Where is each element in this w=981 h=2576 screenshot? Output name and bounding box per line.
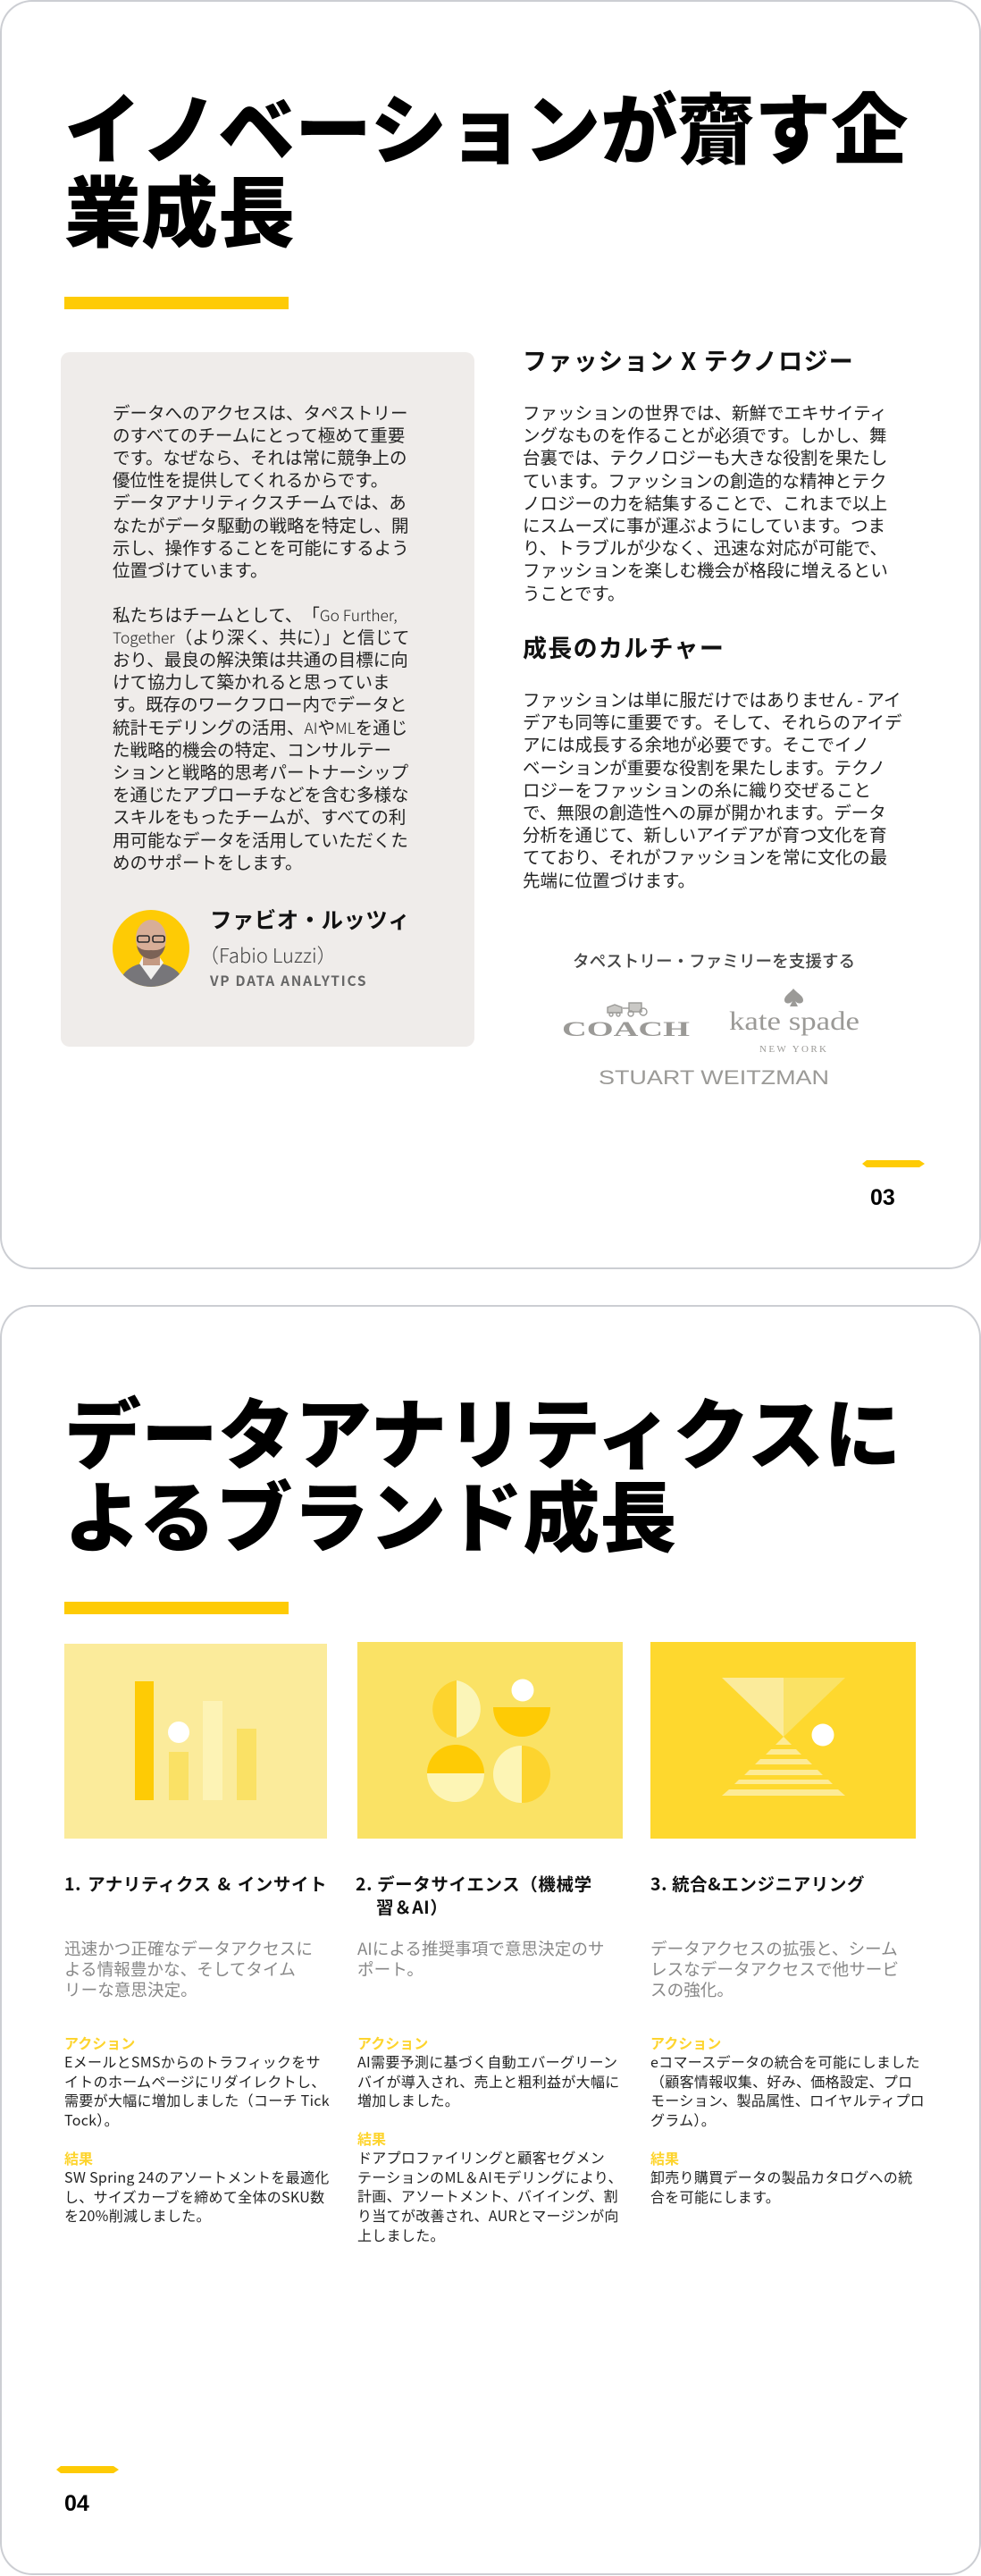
- column 3: [650, 1870, 925, 2207]
- logo: coach: [562, 1002, 690, 1040]
- action text: 需要が大幅に増加しました（コーチ Tick: [64, 2089, 330, 2110]
- column 1: [64, 1870, 330, 2226]
- description: 迅速かつ正確なデータアクセスに: [64, 1936, 313, 1959]
- heading: 3. 統合&エンジニアリング: [650, 1870, 865, 1896]
- text block: culture of growth: アには成長する余地が必要です。そこでイノ: [523, 730, 869, 756]
- description: レスなデータアクセスで他サービ: [650, 1956, 899, 1981]
- description: [357, 1936, 605, 1981]
- text block: quote paragraph 2: [113, 601, 410, 874]
- text block: quote paragraph 1: のすべてのチームにとって極めて重要: [113, 421, 405, 447]
- accent: page marker: [862, 1160, 925, 1167]
- text block: quote paragraph 1: 優位性を提供してくれるからです。: [113, 466, 388, 492]
- description: リーな意思決定。: [64, 1977, 197, 2000]
- action text: イトのホームページにリダイレクトし、: [64, 2070, 326, 2092]
- action text: （顧客情報収集、好み、価格設定、プロ: [650, 2070, 912, 2092]
- heading: 2. データサイエンス（機械学: [356, 1870, 592, 1896]
- logo: stuart weitzman: STUART WEITZMAN: [599, 1066, 829, 1089]
- text block: quote paragraph 2: た戦略的機会の特定、コンサルテー: [113, 736, 391, 762]
- result text: [650, 2166, 912, 2207]
- text block: fashion x technology: ファッションを楽しむ機会が格段に増えるとい: [523, 556, 888, 582]
- heading: [356, 1870, 592, 1919]
- result text: 合を可能にします。: [650, 2185, 780, 2207]
- title: innovation: [64, 68, 908, 263]
- action text: eコマースデータの統合を可能にしました: [650, 2050, 920, 2072]
- text block: fashion x technology: ングなものを作ることが必須です。しかし、舞: [523, 421, 887, 447]
- result text: ドアプロファイリングと顧客セグメン: [357, 2146, 605, 2168]
- description: よる情報豊かな、そしてタイム: [64, 1956, 296, 1981]
- logo: kate spade: [729, 989, 859, 1055]
- text: page number 04: 04: [64, 2491, 89, 2516]
- result text: [357, 2146, 623, 2245]
- title: brand growth: データアナリティクスに: [64, 1373, 901, 1485]
- text block: fashion x technology: にスムーズに事が運ぶようにしています。つま: [523, 511, 885, 537]
- action text: [357, 2050, 620, 2110]
- text block: culture of growth: ファッションは単に服だけではありません - アイ: [523, 686, 901, 711]
- text block: quote paragraph 1: [113, 399, 409, 582]
- result text: テーションのML＆AIモデリングにより、: [357, 2166, 623, 2187]
- text block: quote paragraph 2: めのサポートをします。: [113, 848, 303, 874]
- text block: fashion x technology: ノロジーの力を結集することで、これまで以上: [523, 489, 887, 515]
- result text: を20%削減しました。: [64, 2204, 211, 2226]
- heading: culture of growth: 成長のカルチャー: [523, 629, 725, 664]
- action text: [650, 2050, 925, 2130]
- logo: coach: COACH: [562, 1018, 690, 1040]
- text block: quote paragraph 2: 用可能なデータを活用していただくた: [113, 826, 408, 852]
- label: result: 結果: [357, 2127, 386, 2149]
- result text: し、サイズカーブを締めて全体のSKU数: [64, 2185, 324, 2207]
- description: [650, 1936, 899, 2000]
- text block: fashion x technology: 台裏では、テクノロジーも大きな役割を果たし: [523, 443, 887, 469]
- text block: quote paragraph 2: 統計モデリングの活用、AIやMLを通じ: [113, 713, 407, 739]
- icon: portrait: [113, 910, 189, 987]
- heading: 習＆AI）: [376, 1893, 448, 1919]
- accent bar: [64, 297, 289, 309]
- text block: fashion x technology: り、トラブルが少なく、迅速な対応が可能で、: [523, 534, 887, 560]
- logo: kate spade: NEW YORK: [759, 1044, 826, 1055]
- text: supporting family heading: タペストリー・ファミリーを支援する: [573, 948, 855, 972]
- action text: グラム）。: [650, 2109, 716, 2130]
- action text: [64, 2050, 330, 2130]
- text block: culture of growth: ロジーをファッションの糸に織り交ぜること: [523, 776, 871, 802]
- action text: モーション、製品属性、ロイヤルティプロ: [650, 2089, 925, 2110]
- text: romanised name: （Fabio Luzzi）: [199, 940, 337, 969]
- result text: 計画、アソートメント、バイイング、割: [357, 2185, 618, 2206]
- result text: SW Spring 24のアソートメントを最適化: [64, 2166, 330, 2187]
- description: データアクセスの拡張と、シーム: [650, 1936, 898, 1959]
- label: result: 結果: [650, 2147, 679, 2168]
- action text: Tock）。: [64, 2109, 119, 2130]
- text: name: ファビオ・ルッツィ: [210, 904, 410, 935]
- text block: culture of growth: 分析を通じて、新しいアイデアが育つ文化を育: [523, 821, 887, 846]
- logo: kate spade: kate spade: [729, 1006, 859, 1036]
- text block: culture of growth: デアも同等に重要です。そして、それらのアイデ: [523, 708, 902, 734]
- action text: EメールとSMSからのトラフィックをサ: [64, 2050, 321, 2072]
- heading: 1. アナリティクス & インサイト: [64, 1870, 327, 1896]
- heading: fashion x technology: ファッション X テクノロジー: [523, 342, 854, 377]
- column 2: [356, 1870, 623, 2245]
- text block: fashion x technology: ています。ファッションの創造的な精神とテク: [523, 467, 887, 492]
- label: action: アクション: [650, 2032, 721, 2053]
- text block: fashion x technology: ファッションの世界では、新鮮でエキサイティ: [523, 399, 887, 425]
- text block: quote paragraph 1: データアナリティクスチームでは、あ: [113, 488, 407, 514]
- icon illustration: data science: [357, 1642, 623, 1839]
- text block: quote paragraph 2: を通じたアプローチなどを含む多様な: [113, 780, 409, 806]
- text block: quote paragraph 2: Together（より深く、共に）」と信じて: [113, 623, 410, 649]
- text block: fashion x technology: うことです。: [523, 579, 625, 605]
- icon illustration: integration: [650, 1642, 916, 1839]
- title: brand growth: [64, 1373, 901, 1568]
- text block: culture of growth: [523, 686, 902, 892]
- accent bar: [64, 1602, 289, 1614]
- result text: 卸売り購買データの製品カタログへの統: [650, 2166, 912, 2187]
- text block: quote paragraph 1: データへのアクセスは、タペストリー: [113, 399, 408, 424]
- title: innovation: イノベーションが齎す企: [64, 68, 908, 180]
- result text: り当てが改善され、AURとマージンが向: [357, 2204, 619, 2226]
- panel: page 04 card: [0, 1305, 981, 2575]
- description: [64, 1936, 313, 2000]
- label: result: 結果: [64, 2147, 93, 2168]
- result text: [64, 2166, 330, 2226]
- action text: バイが導入され、売上と粗利益が大幅に: [357, 2070, 620, 2092]
- description: AIによる推奨事項で意思決定のサ: [357, 1936, 605, 1959]
- text block: quote paragraph 2: す。既存のワークフロー内でデータと: [113, 690, 407, 716]
- text block: quote paragraph 2: ションと戦略的思考パートナーシップ: [113, 758, 408, 784]
- action text: 増加しました。: [357, 2089, 459, 2110]
- text block: culture of growth: ベーションが重要な役割を果たします。テクノ: [523, 753, 885, 779]
- text block: culture of growth: てており、それがファッションを常に文化の最: [523, 843, 887, 869]
- text: role: VP DATA ANALYTICS: [210, 971, 367, 990]
- title: innovation: 業成長: [64, 151, 295, 263]
- description: スの強化。: [650, 1977, 734, 2000]
- text block: culture of growth: で、無限の創造性への扉が開かれます。データ: [523, 798, 886, 824]
- text block: quote paragraph 1: 示し、操作することを可能にするよう: [113, 534, 409, 560]
- panel: quote: [61, 352, 474, 1047]
- text block: quote paragraph 2: 私たちはチームとして、「Go Further,: [113, 601, 398, 626]
- text: page number 03: 03: [870, 1185, 895, 1210]
- text block: quote paragraph 1: 位置づけています。: [113, 556, 268, 582]
- chart illustration: analytics: [64, 1644, 327, 1839]
- result text: 上しました。: [357, 2224, 445, 2245]
- label: action: アクション: [64, 2032, 135, 2053]
- accent: page marker: [56, 2466, 119, 2473]
- text block: quote paragraph 2: スキルをもったチームが、すべての利: [113, 803, 406, 829]
- action text: AI需要予測に基づく自動エバーグリーン: [357, 2050, 617, 2072]
- description: ポート。: [357, 1956, 423, 1981]
- panel: page 03 card: [0, 0, 981, 1269]
- text block: quote paragraph 2: おり、最良の解決策は共通の目標に向: [113, 645, 408, 671]
- text block: culture of growth: 先端に位置づけます。: [523, 866, 695, 892]
- title: brand growth: よるブランド成長: [64, 1456, 676, 1568]
- label: action: アクション: [357, 2032, 428, 2053]
- text block: quote paragraph 1: です。なぜなら、それは常に競争上の: [113, 443, 407, 469]
- text block: quote paragraph 1: なたがデータ駆動の戦略を特定し、開: [113, 511, 409, 537]
- text block: quote paragraph 2: けて協力して築かれると思っていま: [113, 668, 390, 694]
- text block: fashion x technology: [523, 399, 888, 605]
